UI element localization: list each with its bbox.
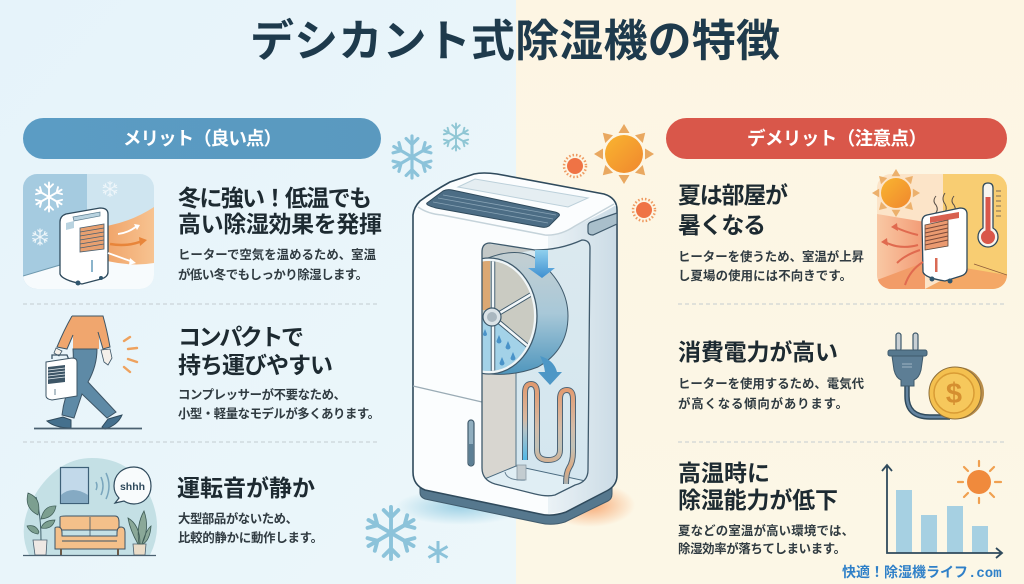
top lip bbox=[418, 204, 614, 235]
window outline bbox=[482, 240, 590, 496]
demerit 3 heading bbox=[678, 460, 838, 513]
merit 3 body: 比較的静かに動作します。 bbox=[178, 530, 323, 545]
cutaway window bbox=[482, 244, 584, 495]
merit 2 heading: コンパクトで bbox=[178, 324, 304, 350]
demerit 3 body: 除湿効率が落ちてしまいます。 bbox=[678, 541, 846, 556]
heater coil bbox=[525, 384, 573, 484]
merit 1 heading: 高い除湿効果を発揮 bbox=[178, 211, 382, 237]
demerit 3 heading: 除湿能力が低下 bbox=[678, 487, 838, 513]
merit 2 body: 小型・軽量なモデルが多くあります。 bbox=[178, 406, 380, 421]
demerit 2 body: ヒーターを使用するため、電気代 bbox=[678, 376, 865, 391]
panel: merits bbox=[23, 118, 382, 556]
arrow: air in bbox=[528, 250, 555, 278]
lower seam bbox=[413, 386, 482, 402]
merit 2 body: コンプレッサーが不要なため、 bbox=[178, 387, 346, 402]
merit 3 body bbox=[178, 511, 323, 545]
demerit 3 body: 夏などの室温が高い環境では、 bbox=[678, 523, 854, 538]
demerit 1 body: し夏場の使用には不向きです。 bbox=[678, 268, 852, 283]
icon: person carrying dehumidifier bbox=[34, 316, 142, 429]
demerit 1 body bbox=[678, 249, 864, 283]
top vent bbox=[427, 190, 559, 227]
desiccant rotor bbox=[482, 252, 568, 375]
merit 1 body: が低い冬でもしっかり除湿します。 bbox=[178, 267, 368, 282]
demerit 2 body: が高くなる傾向があります。 bbox=[678, 396, 848, 411]
demerit 1 heading bbox=[678, 182, 788, 238]
merit 1 heading bbox=[178, 185, 382, 237]
demerit 3 heading: 高温時に bbox=[678, 460, 770, 486]
icon: plug and coin bbox=[888, 333, 984, 419]
icon: plug and coin: $ bbox=[946, 378, 962, 410]
icon: quiet living room bbox=[23, 458, 157, 556]
demerits heading pill bbox=[666, 118, 1007, 159]
demerit 1 heading: 夏は部屋が bbox=[678, 182, 788, 208]
icon: hot room with sun and thermometer bbox=[872, 169, 1007, 289]
arrow: air to heater bbox=[538, 356, 562, 385]
icon: quiet living room: shhh bbox=[120, 481, 145, 493]
merit 2 body bbox=[178, 387, 380, 421]
demerit 3 body bbox=[678, 523, 854, 556]
background: right cream half bbox=[516, 0, 1024, 584]
floor glow bbox=[395, 483, 635, 527]
side handle bbox=[588, 213, 617, 235]
merit 3 body: 大型部品がないため、 bbox=[178, 511, 298, 526]
central dehumidifier cutaway bbox=[395, 173, 635, 527]
bars bbox=[896, 490, 988, 553]
title: デシカント式除湿機の特徴 bbox=[250, 17, 780, 66]
merit 2 heading bbox=[178, 324, 333, 378]
unit right side shading bbox=[548, 205, 616, 514]
demerit 2 body bbox=[678, 376, 865, 411]
merit 3 heading: 運転音が静か bbox=[177, 475, 315, 501]
merit 1 body: ヒーターで空気を温めるため、室温 bbox=[178, 247, 377, 262]
chart sun bbox=[958, 461, 1001, 503]
water level gauge bbox=[468, 420, 474, 466]
merit 2 heading: 持ち運びやすい bbox=[178, 352, 333, 378]
unit body bbox=[413, 173, 617, 515]
demerit 2 heading: 消費電力が高い bbox=[678, 339, 838, 365]
unit base bbox=[420, 488, 612, 524]
watermark: 快適！除湿機ライフ.com bbox=[842, 564, 1002, 582]
merits heading pill bbox=[23, 118, 381, 159]
merits heading pill: メリット（良い点） bbox=[123, 128, 282, 149]
panel: demerits bbox=[666, 118, 1007, 558]
axes bbox=[882, 465, 1002, 558]
background: left blue half bbox=[0, 0, 516, 584]
bar chart with sun bbox=[882, 461, 1002, 558]
decor: suns bbox=[564, 124, 655, 221]
top panel bbox=[458, 179, 588, 207]
icon: dehumidifier blowing warm air in cold room bbox=[23, 174, 154, 289]
demerits heading pill: デメリット（注意点） bbox=[747, 128, 927, 149]
merit 1 body bbox=[178, 247, 377, 282]
demerit 1 heading: 暑くなる bbox=[678, 212, 766, 238]
merit 1 heading: 冬に強い！低温でも bbox=[178, 185, 372, 211]
decor: snowflakes bbox=[365, 124, 470, 563]
demerit 1 body: ヒーターを使うため、室温が上昇 bbox=[678, 249, 864, 264]
